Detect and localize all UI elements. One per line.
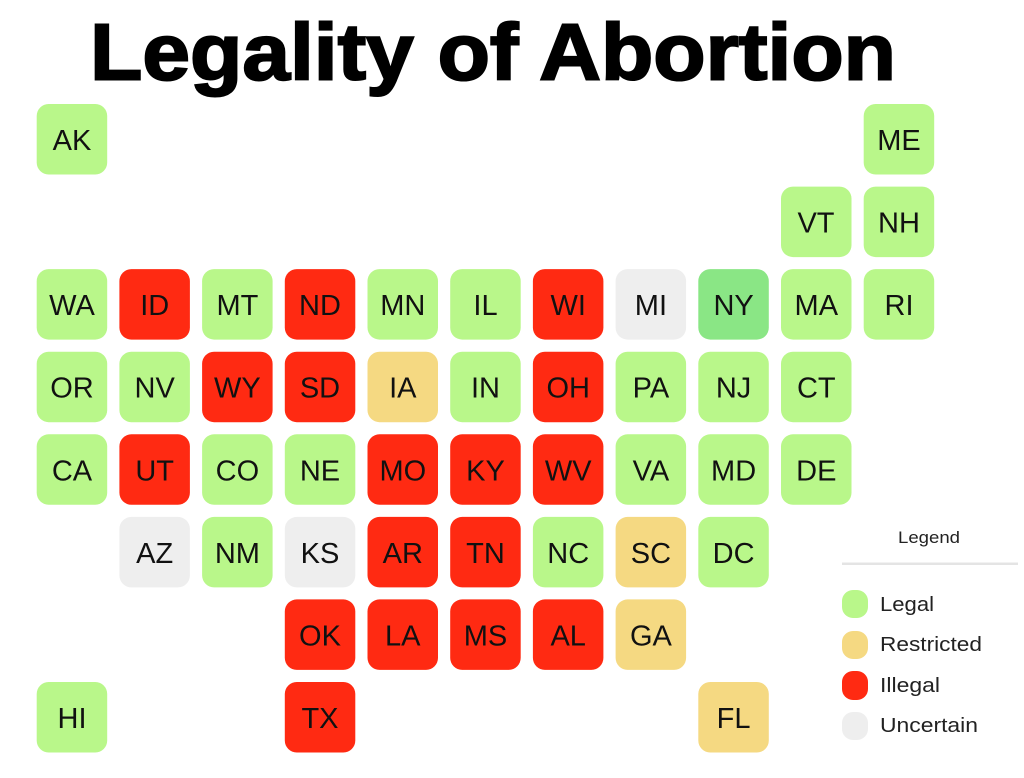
tile: IL	[450, 269, 521, 340]
tile: AR	[368, 517, 438, 587]
tile: OR: OR	[50, 373, 94, 405]
legend	[842, 528, 1018, 740]
tile: PA: PA	[633, 373, 670, 405]
legend item: Uncertain	[842, 712, 978, 740]
tile: AL	[533, 599, 603, 670]
tile: DC: DC	[713, 538, 755, 570]
tile: TN: TN	[466, 538, 505, 570]
tile: UT: UT	[135, 455, 174, 487]
tile: TN	[450, 517, 521, 587]
tile: OH: OH	[546, 373, 590, 405]
legend item: Restricted: Restricted	[880, 634, 982, 656]
tile: CO	[202, 434, 273, 505]
tile: AZ: AZ	[136, 538, 173, 570]
tile: GA: GA	[630, 620, 673, 652]
title: Legality of Abortion	[90, 8, 896, 96]
tile: TX: TX	[301, 703, 339, 735]
tile: NY: NY	[713, 290, 754, 322]
tile: SD	[285, 352, 355, 422]
tile: WA: WA	[49, 290, 95, 322]
tile: WV: WV	[545, 455, 592, 487]
tile: HI: HI	[58, 703, 86, 735]
tile: SC: SC	[631, 538, 671, 570]
tile: MI	[616, 269, 686, 340]
tile: PA	[616, 352, 686, 422]
tile: CA	[37, 434, 107, 505]
tile: TX	[285, 682, 355, 752]
tile: CA: CA	[52, 455, 93, 487]
tile: AZ	[119, 517, 190, 587]
tile: KY: KY	[466, 455, 505, 487]
legend item: Legal: Legal	[880, 594, 934, 616]
tile: MT: MT	[216, 290, 259, 322]
tile: WV	[533, 434, 603, 505]
legend item: Illegal	[842, 671, 940, 700]
tile: SD: SD	[300, 373, 340, 405]
tile: OK: OK	[299, 620, 342, 652]
tile: MN	[368, 269, 438, 340]
tile: IA	[368, 352, 438, 422]
tile: DE	[781, 434, 852, 505]
tile: LA: LA	[385, 620, 421, 652]
tile: ID	[119, 269, 190, 340]
legend item: Uncertain: Uncertain	[880, 715, 978, 737]
tile: WY: WY	[214, 373, 261, 405]
tile: VT: VT	[797, 208, 835, 240]
tile: SC	[616, 517, 686, 587]
tile: CO: CO	[216, 455, 259, 487]
legend item: Illegal: Illegal	[880, 675, 940, 697]
legend heading: Legend	[898, 528, 960, 547]
tile: NV: NV	[135, 373, 175, 405]
tile: MI: MI	[635, 290, 667, 322]
tile: ME	[864, 104, 934, 174]
tile: OK	[285, 599, 355, 670]
tile: NH: NH	[878, 208, 920, 240]
tile: MO	[368, 434, 438, 505]
tile: NY	[698, 269, 769, 340]
tile: ID: ID	[140, 290, 169, 322]
tile: MS	[450, 599, 521, 670]
tile: OH	[533, 352, 603, 422]
tile: AL: AL	[550, 620, 586, 652]
tile: RI: RI	[884, 290, 914, 322]
tile: HI	[37, 682, 107, 752]
tile: MT	[202, 269, 273, 340]
tile: LA	[368, 599, 438, 670]
legend item: Legal	[842, 590, 934, 618]
tile: MN: MN	[380, 290, 425, 322]
tile: NM	[202, 517, 273, 587]
tile: MD	[698, 434, 769, 505]
tile: NJ	[698, 352, 769, 422]
tile: NC	[533, 517, 603, 587]
tile: MO: MO	[379, 455, 426, 487]
tile: NC: NC	[547, 538, 589, 570]
tile: GA	[616, 599, 686, 670]
tile: NH	[864, 187, 934, 257]
tile: NM: NM	[215, 538, 260, 570]
tile: VA	[616, 434, 686, 505]
tile: WA	[37, 269, 107, 340]
tile: AR: AR	[383, 538, 423, 570]
tile: MA: MA	[795, 290, 839, 322]
tile: NE: NE	[300, 455, 340, 487]
tile: NJ: NJ	[716, 373, 751, 405]
tile: DC	[698, 517, 769, 587]
tile: VA: VA	[633, 455, 670, 487]
panel: tile grid map	[37, 104, 934, 752]
tile: IA: IA	[389, 373, 417, 405]
tile: UT	[119, 434, 190, 505]
tile: WI: WI	[550, 290, 586, 322]
tile: RI	[864, 269, 934, 340]
tile: MS: MS	[464, 620, 507, 652]
tile: FL	[698, 682, 769, 752]
tile: MA	[781, 269, 852, 340]
tile: FL: FL	[717, 703, 751, 735]
tile: IN: IN	[471, 373, 500, 405]
tile: AK	[37, 104, 107, 174]
legend item: Restricted	[842, 631, 982, 659]
tile: ND: ND	[299, 290, 341, 322]
tile: ME: ME	[877, 125, 921, 157]
tile: CT: CT	[797, 373, 836, 405]
tile: KS: KS	[301, 538, 339, 570]
tile: DE: DE	[796, 455, 836, 487]
tile: NE	[285, 434, 355, 505]
tile: WI	[533, 269, 603, 340]
tile: CT	[781, 352, 852, 422]
tile: NV	[119, 352, 190, 422]
tile: WY	[202, 352, 273, 422]
tile: AK: AK	[53, 125, 92, 157]
tile: IN	[450, 352, 521, 422]
tile: ND	[285, 269, 355, 340]
tile: VT	[781, 187, 852, 257]
tile: KS	[285, 517, 355, 587]
tile: KY	[450, 434, 521, 505]
tile: OR	[37, 352, 107, 422]
tile: IL: IL	[473, 290, 498, 322]
tile: MD: MD	[711, 455, 756, 487]
